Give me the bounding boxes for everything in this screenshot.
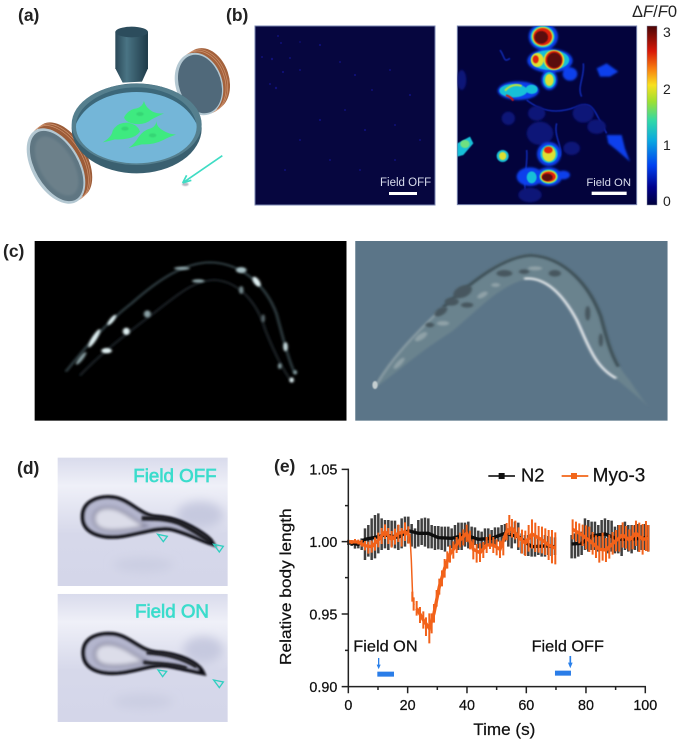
icon: field direction arrow: [182, 156, 222, 186]
panel b: field on image: [457, 23, 637, 205]
series: Myo-3 error bars and line: [348, 515, 648, 643]
arrowheads: [158, 534, 223, 552]
label (b): (b): [226, 5, 248, 25]
image: field off: [58, 458, 228, 586]
intestinal texture: [425, 269, 603, 347]
x tick labels: 100: [633, 698, 657, 714]
caption: Field OFF: Field OFF: [380, 177, 431, 189]
legend: Myo-3: [593, 466, 645, 487]
panel e: line chart: [278, 463, 657, 739]
y tick labels: 1.05: [309, 463, 337, 479]
head tip: [372, 381, 378, 389]
icon: right coil: [167, 42, 238, 122]
active cells: cyan halo: [457, 26, 569, 184]
color bar: [632, 3, 677, 209]
label (e): (e): [274, 456, 295, 476]
label (a): (a): [18, 5, 39, 25]
active cells: red core: [506, 28, 563, 182]
x tick labels: 40: [459, 698, 475, 714]
colour bar tick labels: [663, 24, 671, 209]
y tick labels: 0.95: [309, 607, 337, 623]
panel d: worm images: [58, 458, 228, 722]
panel c: DIC worm: [355, 241, 668, 421]
bright muscle segments: [74, 267, 297, 383]
annotation: Field OFF: [532, 638, 604, 676]
legend: [488, 465, 645, 487]
legend: N2: [521, 465, 544, 486]
x axis title: Time (s): [473, 720, 535, 739]
panel a: microscope dish and coils: [15, 27, 238, 214]
y tick labels: 1.00: [309, 535, 337, 551]
colour bar title: ΔF/F0: [632, 3, 677, 21]
active cells: yellow ring: [460, 27, 564, 183]
panel c: fluorescence worm: [35, 241, 346, 421]
caption: Field OFF: Field OFF: [133, 465, 217, 486]
axes with ticks: [342, 469, 646, 693]
colour bar tick labels: 0: [663, 193, 671, 209]
y tick labels: [309, 463, 337, 696]
icon: green cells: [103, 101, 176, 148]
worm head light edge: [376, 314, 436, 386]
blue cells: [498, 23, 630, 186]
caption: Field ON: Field ON: [135, 601, 209, 622]
colour bar tick labels: 3: [663, 24, 671, 40]
faint body edges: [66, 262, 295, 373]
scale bar: [389, 192, 417, 195]
worm dark top edge: [443, 255, 618, 367]
y axis title: Relative body length: [278, 508, 295, 665]
annotation: Field OFF: Field OFF: [532, 638, 604, 655]
x tick labels: 80: [578, 698, 594, 714]
scale bar: [592, 192, 627, 195]
arrowheads: [158, 670, 223, 688]
panel b: field off image: [255, 26, 435, 205]
dim neuron network: [500, 50, 607, 197]
bright inner edge: [524, 278, 616, 378]
x tick labels: [344, 698, 657, 714]
label (c): (c): [3, 241, 24, 261]
caption: Field ON: Field ON: [586, 177, 631, 189]
x tick labels: 20: [400, 698, 416, 714]
icon: objective lens: [115, 27, 148, 83]
active cells: saturated core: [535, 31, 562, 181]
annotation: Field ON: [353, 638, 418, 677]
faint speckled cells: [261, 35, 421, 171]
x tick labels: 60: [518, 698, 534, 714]
label (d): (d): [17, 458, 39, 478]
y tick labels: 0.90: [309, 680, 337, 696]
image: field on: [58, 594, 228, 722]
icon: culture dish: [72, 83, 202, 173]
series: N2 error bars and line: [348, 513, 648, 560]
colour bar tick labels: 1: [663, 137, 671, 153]
icon: left coil: [15, 113, 104, 214]
annotation: Field ON: Field ON: [353, 638, 418, 655]
x tick labels: 0: [344, 698, 352, 714]
colour bar tick labels: 2: [663, 81, 671, 97]
worm body: [378, 257, 641, 399]
